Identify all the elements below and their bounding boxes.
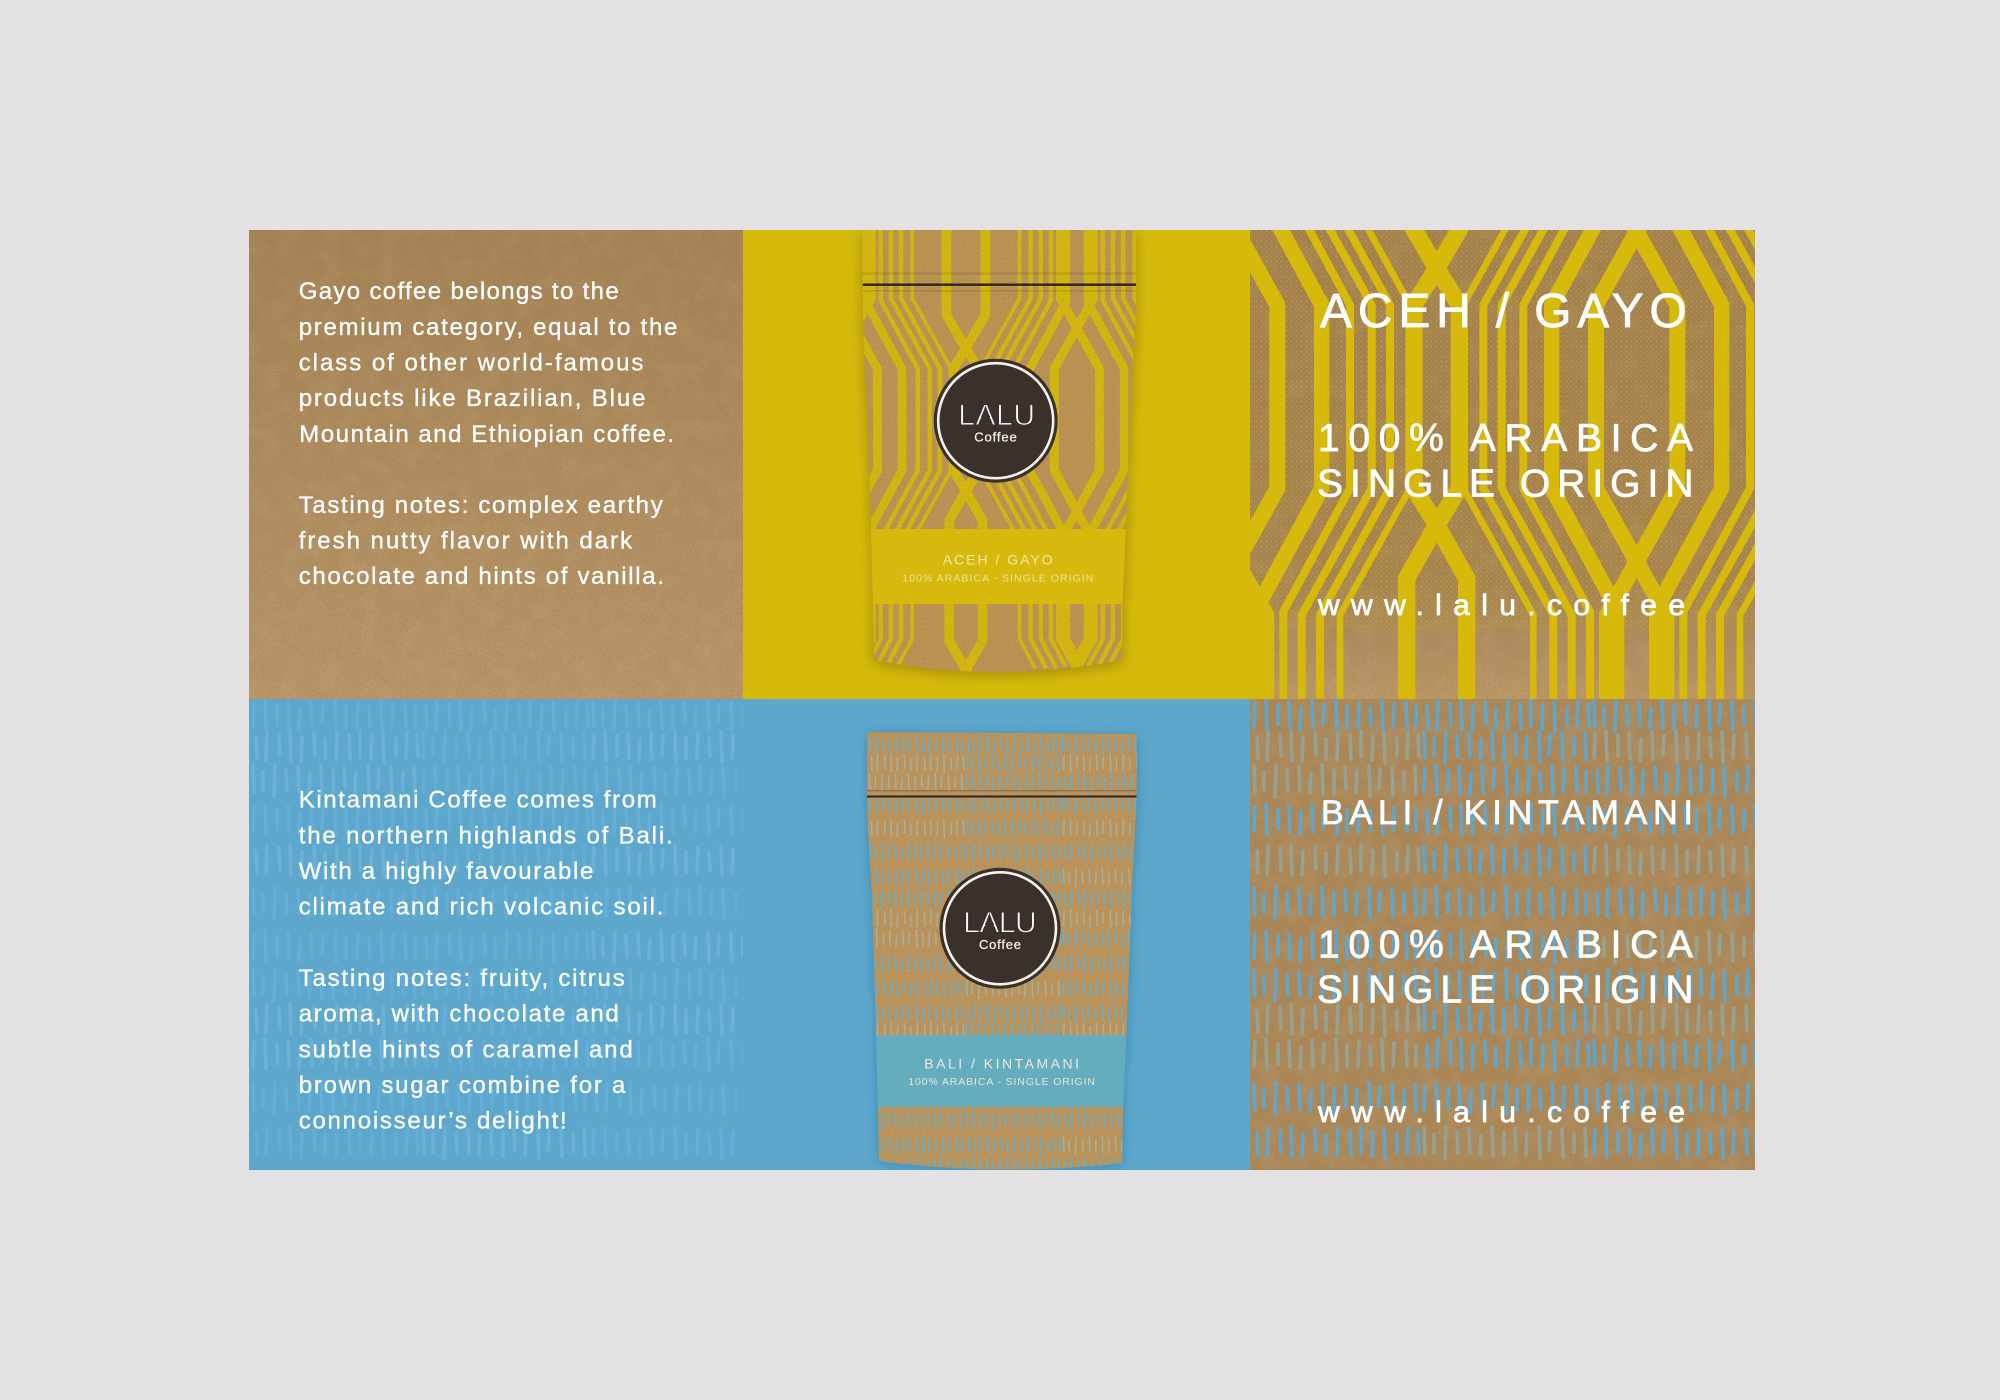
bag label band xyxy=(870,1035,1132,1107)
logo badge: LALU Coffee xyxy=(934,359,1058,483)
logo badge: LALU Coffee: Coffee xyxy=(979,937,1021,952)
bag: Bali Kintamani pouch xyxy=(862,730,1141,1170)
text block: Gayo coffee description: fresh nutty flavor with dark xyxy=(299,528,633,554)
text block: Kintamani description: the northern highlands of Bali. xyxy=(299,822,673,849)
panel: Bali Kintamani coffee bag on blue xyxy=(743,699,1250,1170)
text block: Kintamani description: climate and rich volcanic soil. xyxy=(299,894,663,921)
text block: Gayo coffee description: Tasting notes: complex earthy xyxy=(299,492,663,519)
text block: Kintamani description: brown sugar combine for a xyxy=(299,1072,626,1099)
text block: Gayo coffee description: products like Brazilian, Blue xyxy=(299,385,645,412)
subheading: 100% Arabica single origin xyxy=(1317,417,1694,506)
text block: Gayo coffee description: Mountain and Ethiopian coffee. xyxy=(299,421,674,448)
logo badge: LALU Coffee: LALU xyxy=(958,399,1035,432)
text block: Kintamani description xyxy=(299,787,673,1135)
text block: Kintamani description: aroma, with chocolate and xyxy=(299,1001,619,1028)
text block: Kintamani description: Kintamani Coffee comes from xyxy=(299,787,657,814)
text block: Gayo coffee description: class of other world-famous xyxy=(299,350,643,376)
bag label band xyxy=(868,529,1128,604)
bag label text xyxy=(903,554,1092,582)
heading: BALI / KINTAMANI: BALI / KINTAMANI xyxy=(1321,794,1693,832)
geometric pattern xyxy=(1063,38,1872,878)
subheading: 100% Arabica single origin: SINGLE ORIGIN xyxy=(1317,968,1694,1012)
text block: Gayo coffee description: chocolate and hints of vanilla. xyxy=(299,563,664,590)
brush stroke pattern xyxy=(1254,700,1759,1159)
text block: Kintamani description: With a highly favourable xyxy=(299,858,593,885)
panel: Kintamani description on blue xyxy=(249,699,758,1170)
text block: Kintamani description: connoisseur’s delight! xyxy=(299,1108,567,1135)
subheading: 100% Arabica single origin: 100% ARABICA xyxy=(1318,924,1693,967)
logo badge: LALU Coffee xyxy=(940,868,1060,989)
logo badge: LALU Coffee: LALU xyxy=(963,907,1037,940)
heading: ACEH / GAYO: ACEH / GAYO xyxy=(1320,285,1687,338)
website: www.lalu.coffee xyxy=(1317,589,1685,622)
panel: Aceh Gayo description xyxy=(249,230,743,699)
subheading: 100% Arabica single origin: SINGLE ORIGIN xyxy=(1317,462,1694,506)
bag label text: BALI / KINTAMANI xyxy=(924,1055,1079,1071)
text block: Gayo coffee description xyxy=(299,278,677,590)
bag label text: 100% ARABICA - SINGLE ORIGIN xyxy=(908,1076,1095,1088)
panel: Aceh Gayo pattern and title xyxy=(1250,230,1755,699)
subheading: 100% Arabica single origin: 100% ARABICA xyxy=(1318,417,1693,460)
bag label text xyxy=(909,1058,1094,1085)
bag label text: ACEH / GAYO xyxy=(943,551,1053,567)
text block: Gayo coffee description: Gayo coffee belongs to the xyxy=(299,278,619,305)
text block: Kintamani description: subtle hints of caramel and xyxy=(299,1036,633,1063)
panel: Aceh Gayo coffee bag on yellow xyxy=(743,221,1250,699)
panel: Bali Kintamani pattern and title xyxy=(1250,699,1759,1170)
bag: Aceh Gayo pouch xyxy=(856,230,1143,682)
subheading: 100% Arabica single origin xyxy=(1317,924,1694,1012)
website: www.lalu.coffee xyxy=(1317,1096,1685,1129)
logo badge: LALU Coffee: Coffee xyxy=(974,430,1017,445)
text block: Kintamani description: Tasting notes: fruity, citrus xyxy=(299,965,625,992)
bag label text: 100% ARABICA - SINGLE ORIGIN xyxy=(902,573,1093,585)
text block: Gayo coffee description: premium category, equal to the xyxy=(299,314,677,341)
